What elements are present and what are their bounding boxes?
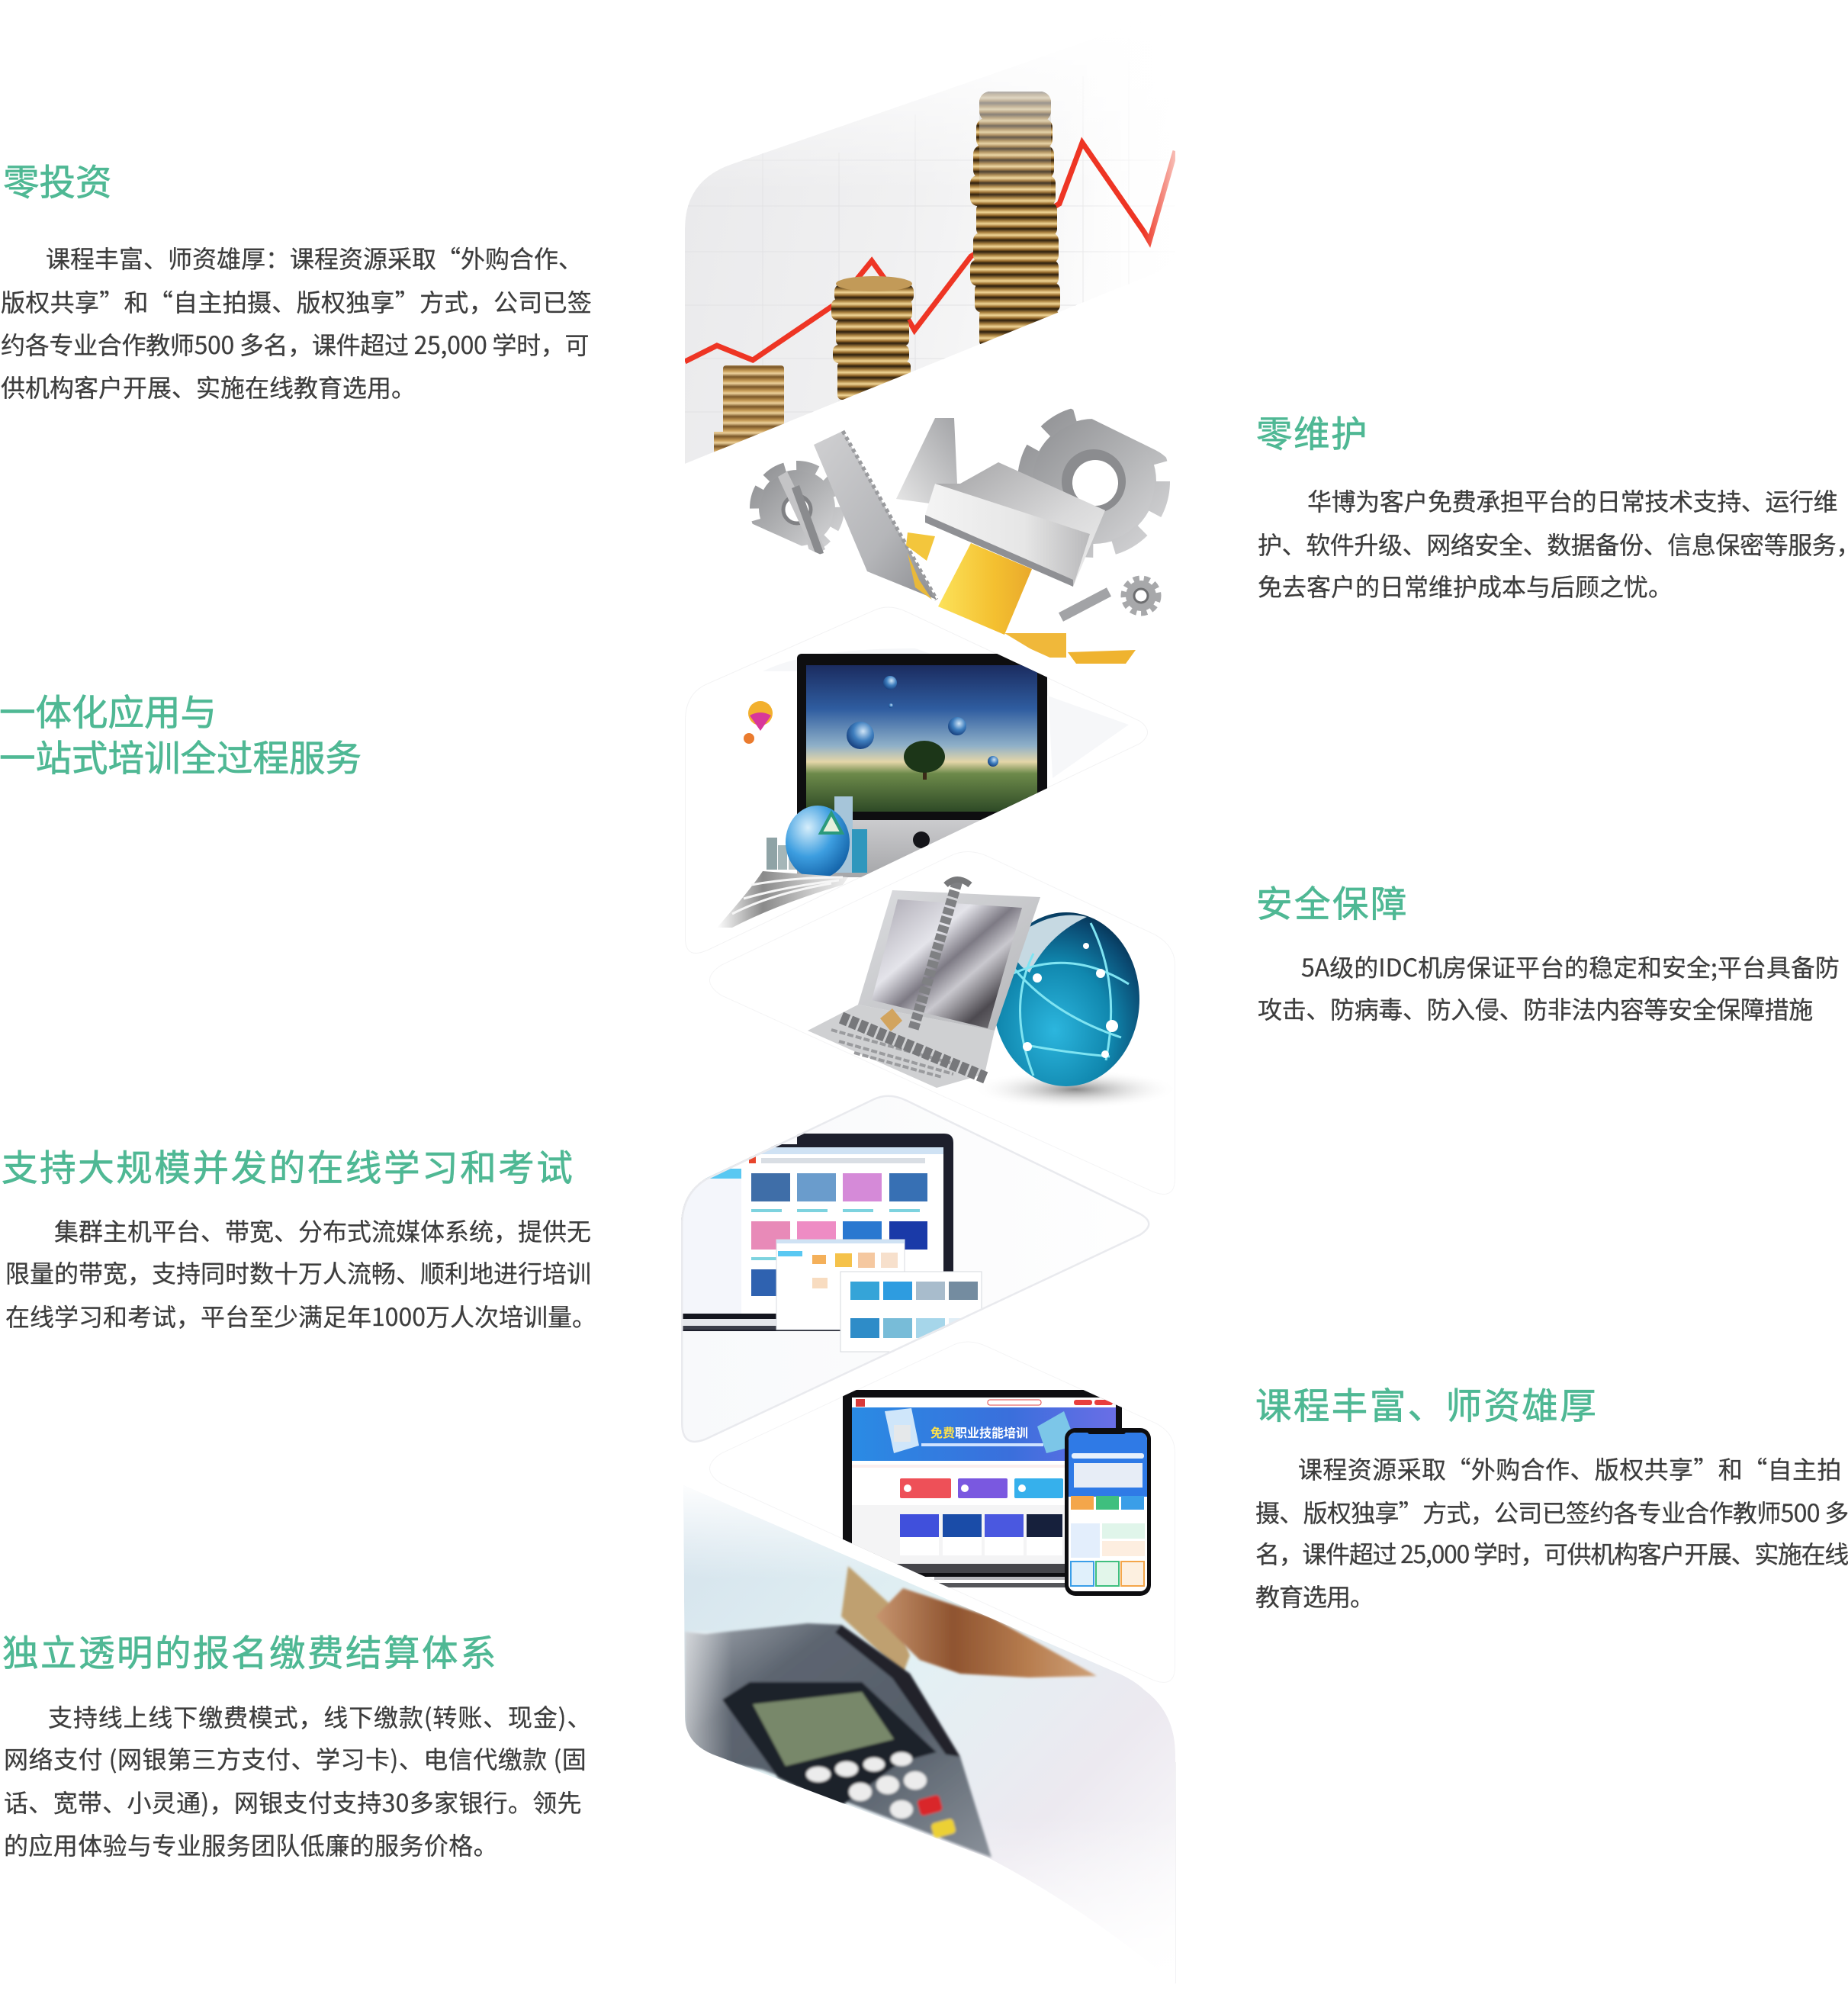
chart: training site laptop bbox=[843, 1390, 1122, 1587]
text block: large-scale concurrency bbox=[5, 1213, 596, 1333]
heading: rich courses: 课程丰富、师资雄厚 bbox=[1255, 1377, 1598, 1430]
text block: payment and settlement: 的应用体验与专业服务团队低廉的服务价格。 bbox=[4, 1827, 498, 1862]
chart: course platform laptop bbox=[681, 1134, 953, 1331]
panel: zero maintenance image bbox=[750, 409, 1170, 664]
heading: payment and settlement: 独立透明的报名缴费结算体系 bbox=[2, 1624, 498, 1677]
icon: set square bbox=[896, 418, 957, 503]
text block: zero investment: 约各专业合作教师500 多名，课件超过 25,000 学时，可 bbox=[1, 326, 589, 362]
text block: security bbox=[1258, 949, 1840, 1026]
chart: second course window bbox=[776, 1240, 905, 1330]
text block: zero investment: 版权共享”和“自主拍摄、版权独享”方式，公司已签 bbox=[1, 284, 592, 319]
icon: open book pages bbox=[717, 871, 848, 928]
icon: globe and city bbox=[767, 796, 867, 879]
heading: integrated application: 一体化应用与 bbox=[0, 684, 217, 736]
chart: third course window bbox=[840, 1272, 982, 1352]
text: banner slogan: 免费职业技能培训 bbox=[930, 1423, 1028, 1441]
text block: zero maintenance: 免去客户的日常维护成本与后顾之忧。 bbox=[1258, 568, 1673, 603]
panel: rich courses image bbox=[709, 1341, 1175, 1683]
text block: zero maintenance bbox=[1258, 483, 1848, 603]
text block: rich courses: 摄、版权独享”方式，公司已签约各专业合作教师500 多 bbox=[1255, 1494, 1848, 1529]
chart: rising red line bbox=[685, 143, 1175, 362]
icon: payment card bbox=[841, 1566, 910, 1674]
icon: yellow-handled hammer bbox=[906, 462, 1136, 664]
text block: large-scale concurrency: 限量的带宽，支持同时数十万人流畅、顺利地进行培训 bbox=[5, 1255, 591, 1290]
text block: rich courses: 课程资源采取“外购合作、版权共享”和“自主拍 bbox=[1298, 1451, 1842, 1486]
icon: hot air balloons bbox=[744, 701, 773, 744]
panel: large-scale online learning image bbox=[681, 1095, 1150, 1443]
icon: POS terminal bbox=[685, 1623, 991, 1858]
text block: zero investment: 课程丰富、师资雄厚：课程资源采取“外购合作、 bbox=[46, 240, 583, 275]
icon: tiny gear and pin bbox=[1061, 578, 1159, 617]
icon: tall coin stack bbox=[970, 92, 1060, 347]
text block: payment and settlement: 话、宽带、小灵通)，网银支付支持30多家银行。领先 bbox=[4, 1784, 582, 1819]
panel: security image bbox=[709, 851, 1178, 1195]
text block: zero investment: 供机构客户开展、实施在线教育选用。 bbox=[1, 369, 416, 404]
text block: zero investment bbox=[1, 240, 592, 404]
icon: chained laptop bbox=[808, 880, 1040, 1088]
heading: zero investment: 零投资 bbox=[3, 153, 111, 206]
heading: integrated application bbox=[0, 684, 362, 782]
panel: payment terminal image bbox=[679, 1480, 1182, 1991]
text block: rich courses bbox=[1255, 1451, 1848, 1613]
panel: faint right edge of lower panels bbox=[1175, 1762, 1176, 1983]
icon: middle coin stack bbox=[831, 276, 914, 400]
text block: payment and settlement bbox=[4, 1699, 592, 1862]
text block: large-scale concurrency: 在线学习和考试，平台至少满足年1000万人次培训量。 bbox=[5, 1298, 596, 1333]
icon: blue network globe bbox=[996, 912, 1152, 1104]
icon: small gear with wrench bbox=[755, 466, 839, 555]
text block: payment and settlement: 支持线上线下缴费模式，线下缴款(转账、现金)、 bbox=[48, 1699, 592, 1734]
heading: security: 安全保障 bbox=[1256, 875, 1409, 928]
text block: rich courses: 名，课件超过 25,000 学时，可供机构客户开展、实施在线 bbox=[1255, 1536, 1848, 1571]
heading: large-scale concurrency: 支持大规模并发的在线学习和考试 bbox=[2, 1139, 575, 1192]
heading: integrated application: 一站式培训全过程服务 bbox=[0, 729, 362, 782]
icon: desktop monitor bbox=[797, 654, 1047, 877]
text block: rich courses: 教育选用。 bbox=[1255, 1578, 1374, 1613]
icon: hand holding card bbox=[876, 1588, 1097, 1677]
text block: payment and settlement: 网络支付 (网银第三方支付、学习卡)、电信代缴款 (固 bbox=[4, 1741, 587, 1776]
icon: large gear bbox=[1025, 413, 1162, 550]
icon: saw bbox=[814, 431, 937, 600]
text block: security: 5A级的IDC机房保证平台的稳定和安全;平台具备防 bbox=[1301, 949, 1840, 984]
icon: small coin stack bbox=[714, 365, 784, 452]
panel: integrated application image bbox=[685, 606, 1148, 954]
panel: zero investment image bbox=[685, 87, 1175, 464]
text block: zero maintenance: 护、软件升级、网络安全、数据备份、信息保密等服务， bbox=[1258, 526, 1848, 561]
heading: zero maintenance: 零维护 bbox=[1256, 405, 1368, 458]
icon: smartphone bbox=[1065, 1428, 1151, 1596]
text block: large-scale concurrency: 集群主机平台、带宽、分布式流媒体系统，提供无 bbox=[54, 1213, 591, 1248]
text block: security: 攻击、防病毒、防入侵、防非法内容等安全保障措施 bbox=[1258, 991, 1813, 1026]
text block: zero maintenance: 华博为客户免费承担平台的日常技术支持、运行维 bbox=[1307, 483, 1837, 518]
